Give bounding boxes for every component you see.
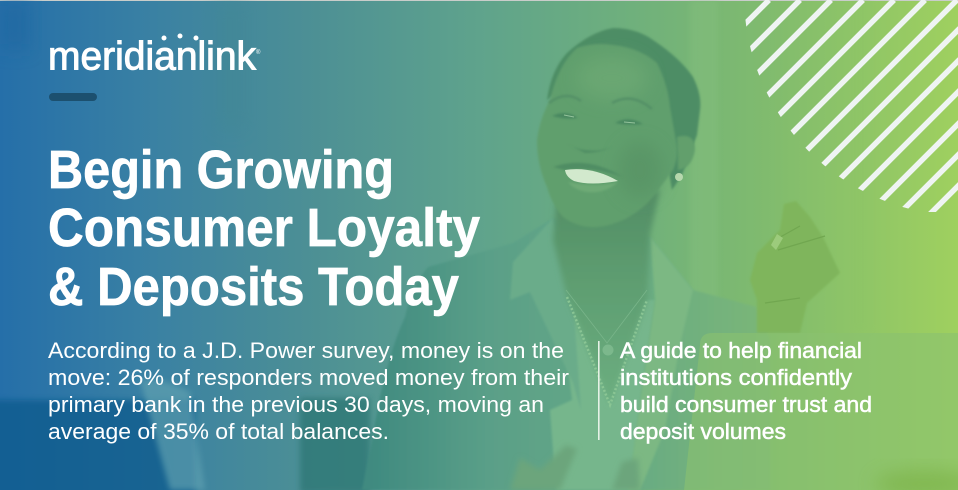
- title: [48, 140, 480, 317]
- guide description: deposit volumes: [620, 419, 786, 444]
- lower hands: [510, 445, 640, 490]
- right lapel: [628, 237, 693, 490]
- body paragraph: According to a J.D. Power survey, money is on the: [48, 338, 564, 363]
- nose: [565, 143, 612, 153]
- left lapel: [510, 218, 581, 410]
- lower lip: [568, 182, 618, 192]
- upper lip: [553, 163, 623, 177]
- ear: [677, 136, 695, 170]
- teeth: [565, 169, 618, 184]
- accent bar: [49, 93, 97, 101]
- corner foliage: [875, 470, 958, 490]
- logo dots: [162, 34, 198, 40]
- pendant: [602, 344, 614, 356]
- hair: [547, 28, 700, 190]
- brows: [549, 96, 652, 109]
- necklace: [566, 290, 647, 343]
- logo: meridianlink: [48, 34, 261, 78]
- shirt and phone: [550, 300, 655, 490]
- body paragraph: [48, 338, 570, 444]
- translucent text panel: [684, 333, 958, 490]
- cheek shadow: [618, 142, 662, 198]
- title: & Deposits Today: [48, 257, 459, 317]
- face: [537, 44, 677, 227]
- guide description: [620, 338, 872, 444]
- jacket: [362, 218, 770, 490]
- title: Begin Growing: [48, 140, 394, 200]
- shirt scalloped edge: [567, 297, 647, 405]
- photo: smiling woman: [362, 28, 770, 490]
- guide description: A guide to help financial: [620, 338, 862, 363]
- face highlight: [576, 56, 648, 100]
- title: Consumer Loyalty: [48, 198, 480, 258]
- body paragraph: primary bank in the previous 30 days, moving an: [48, 392, 544, 417]
- eyes: [552, 113, 643, 125]
- body paragraph: average of 35% of total balances.: [48, 419, 389, 444]
- guide description: institutions confidently: [620, 365, 853, 390]
- guide description: build consumer trust and: [620, 392, 872, 417]
- neck: [553, 190, 660, 405]
- stripe circle motif: [746, 0, 958, 212]
- logo wordmark: meridianlink: [48, 34, 257, 78]
- vertical divider: [598, 341, 600, 440]
- logo registered mark: ®: [256, 49, 261, 56]
- raised hand: [750, 201, 840, 333]
- earring: [675, 173, 683, 181]
- top edge line: [0, 0, 958, 1]
- eye glints: [564, 115, 635, 123]
- body paragraph: move: 26% of responders moved money from their: [48, 365, 570, 390]
